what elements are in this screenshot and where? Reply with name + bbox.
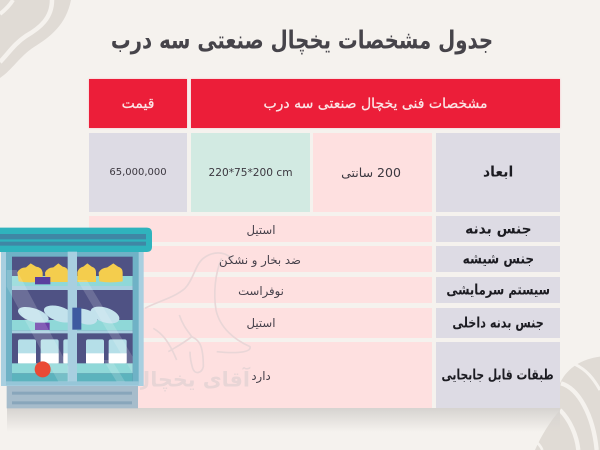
fridge body [1,250,144,386]
fish shelf [12,302,133,331]
title: جدول مشخصات یخچال صنعتی سه درب [111,27,493,55]
fridge door frames [6,252,139,385]
cheese shelf [12,263,133,286]
row label: glass [436,246,560,272]
milk shelf [12,339,133,382]
row label: body material [436,216,560,242]
fridge base [7,385,138,408]
header: technical specifications: مشخصات فنی یخچال صنعتی سه درب [263,96,488,112]
row label: body material: جنس بدنه [465,221,531,237]
price value [89,133,187,212]
height value: 200 سانتی [341,165,401,180]
height value [313,133,432,212]
value: body material: استیل [247,223,275,237]
row background: glass [89,246,432,272]
red tomato [35,361,51,377]
door glass reflections [7,270,133,382]
header: technical specifications [191,79,560,128]
row label: interior material: جنس بدنه داخلی [452,315,544,331]
watermark [140,252,251,392]
door handle [72,308,81,330]
row label: glass: جنس شیشه [462,251,534,267]
row label: adjustable shelves [436,342,560,408]
dimensions in cm: 220*75*200 cm [208,166,293,178]
decorative blob: bottom right [535,356,600,450]
header: price: قیمت [122,96,154,112]
row background: shelves [89,342,432,408]
decorative blob: top left [0,0,71,78]
row label: adjustable shelves: طبقات قابل جابجایی [442,367,554,383]
row label: dimensions [436,133,560,212]
row label: cooling system [436,277,560,303]
table shadow [7,408,560,432]
top canopy [0,228,152,252]
row background: cooling [89,277,432,303]
table [88,78,561,408]
value: glass: ضد بخار و نشکن [219,253,301,267]
dimensions in cm [191,133,310,212]
row background: body material [89,216,432,242]
header: price [89,79,187,128]
row label: dimensions: ابعاد [483,164,513,181]
value: shelves: دارد [251,369,271,383]
row label: interior material [436,308,560,338]
icon: refrigerated display fridge [0,228,152,408]
value: cooling: نوفراست [238,284,284,298]
value: interior: استیل [247,316,275,330]
row background: interior [89,308,432,338]
price value: 65,000,000 [109,167,167,178]
row label: cooling system: سیستم سرمایشی [446,282,550,298]
